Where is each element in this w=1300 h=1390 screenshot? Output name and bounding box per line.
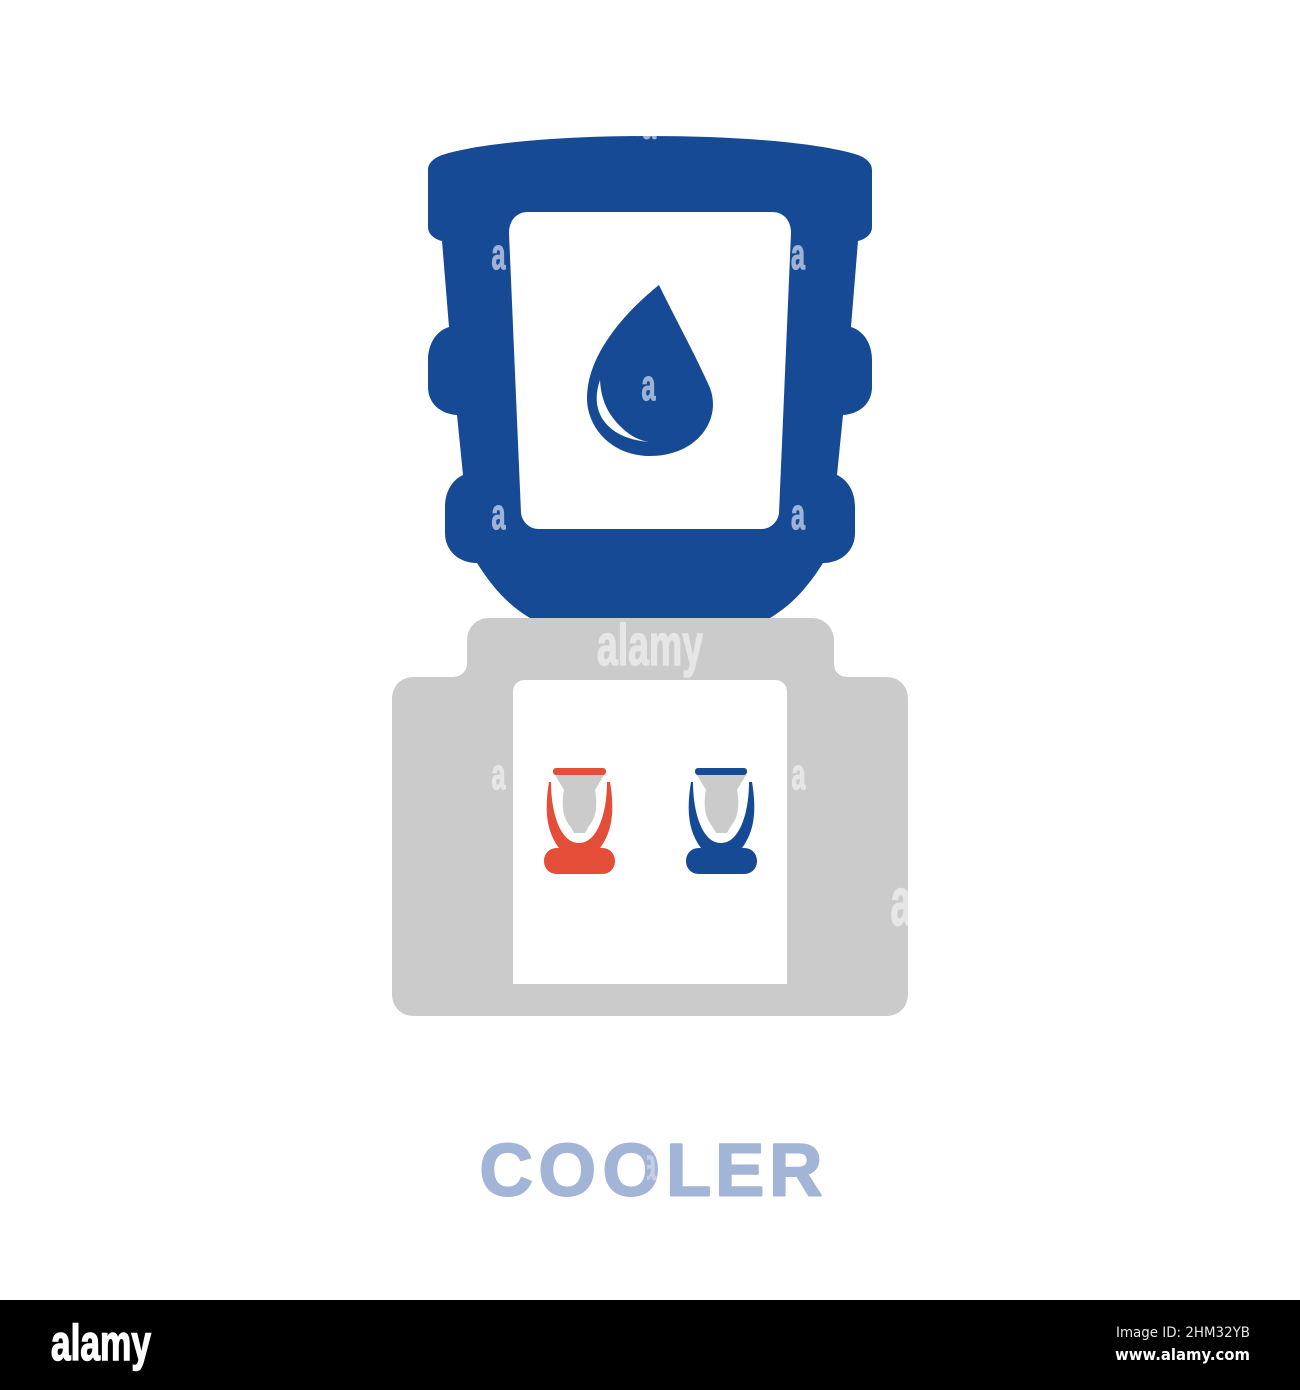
watermark letters: a	[791, 230, 805, 279]
footer logo: alamy: alamy	[51, 1315, 151, 1371]
watermark letters: a	[890, 864, 912, 940]
watermark letters: a	[492, 490, 506, 539]
watermark letters: a	[492, 230, 506, 279]
watermark letters	[492, 100, 912, 940]
icon: cold water tap	[686, 768, 757, 874]
watermark: alamy: alamy	[597, 613, 703, 678]
watermark letters: a	[792, 750, 806, 799]
bottle label panel	[509, 212, 791, 529]
footer site url: www.alamy.com	[1115, 1345, 1250, 1364]
watermark letters: a	[492, 750, 506, 799]
watermark letter on title: a	[642, 1138, 657, 1190]
icon: hot water tap	[544, 768, 615, 874]
footer bar	[0, 1300, 1300, 1390]
icon: cooler base	[392, 618, 908, 1016]
watermark letters: a	[791, 490, 805, 539]
watermark letters: a	[642, 100, 657, 149]
title: COOLER: COOLER	[480, 1128, 822, 1212]
icon: water drop	[587, 285, 713, 456]
dispenser recess	[513, 680, 787, 984]
icon: water cooler bottle	[428, 136, 872, 618]
footer image id: Image ID: 2HM32YB	[1116, 1325, 1250, 1341]
watermark letters: a	[642, 361, 656, 410]
